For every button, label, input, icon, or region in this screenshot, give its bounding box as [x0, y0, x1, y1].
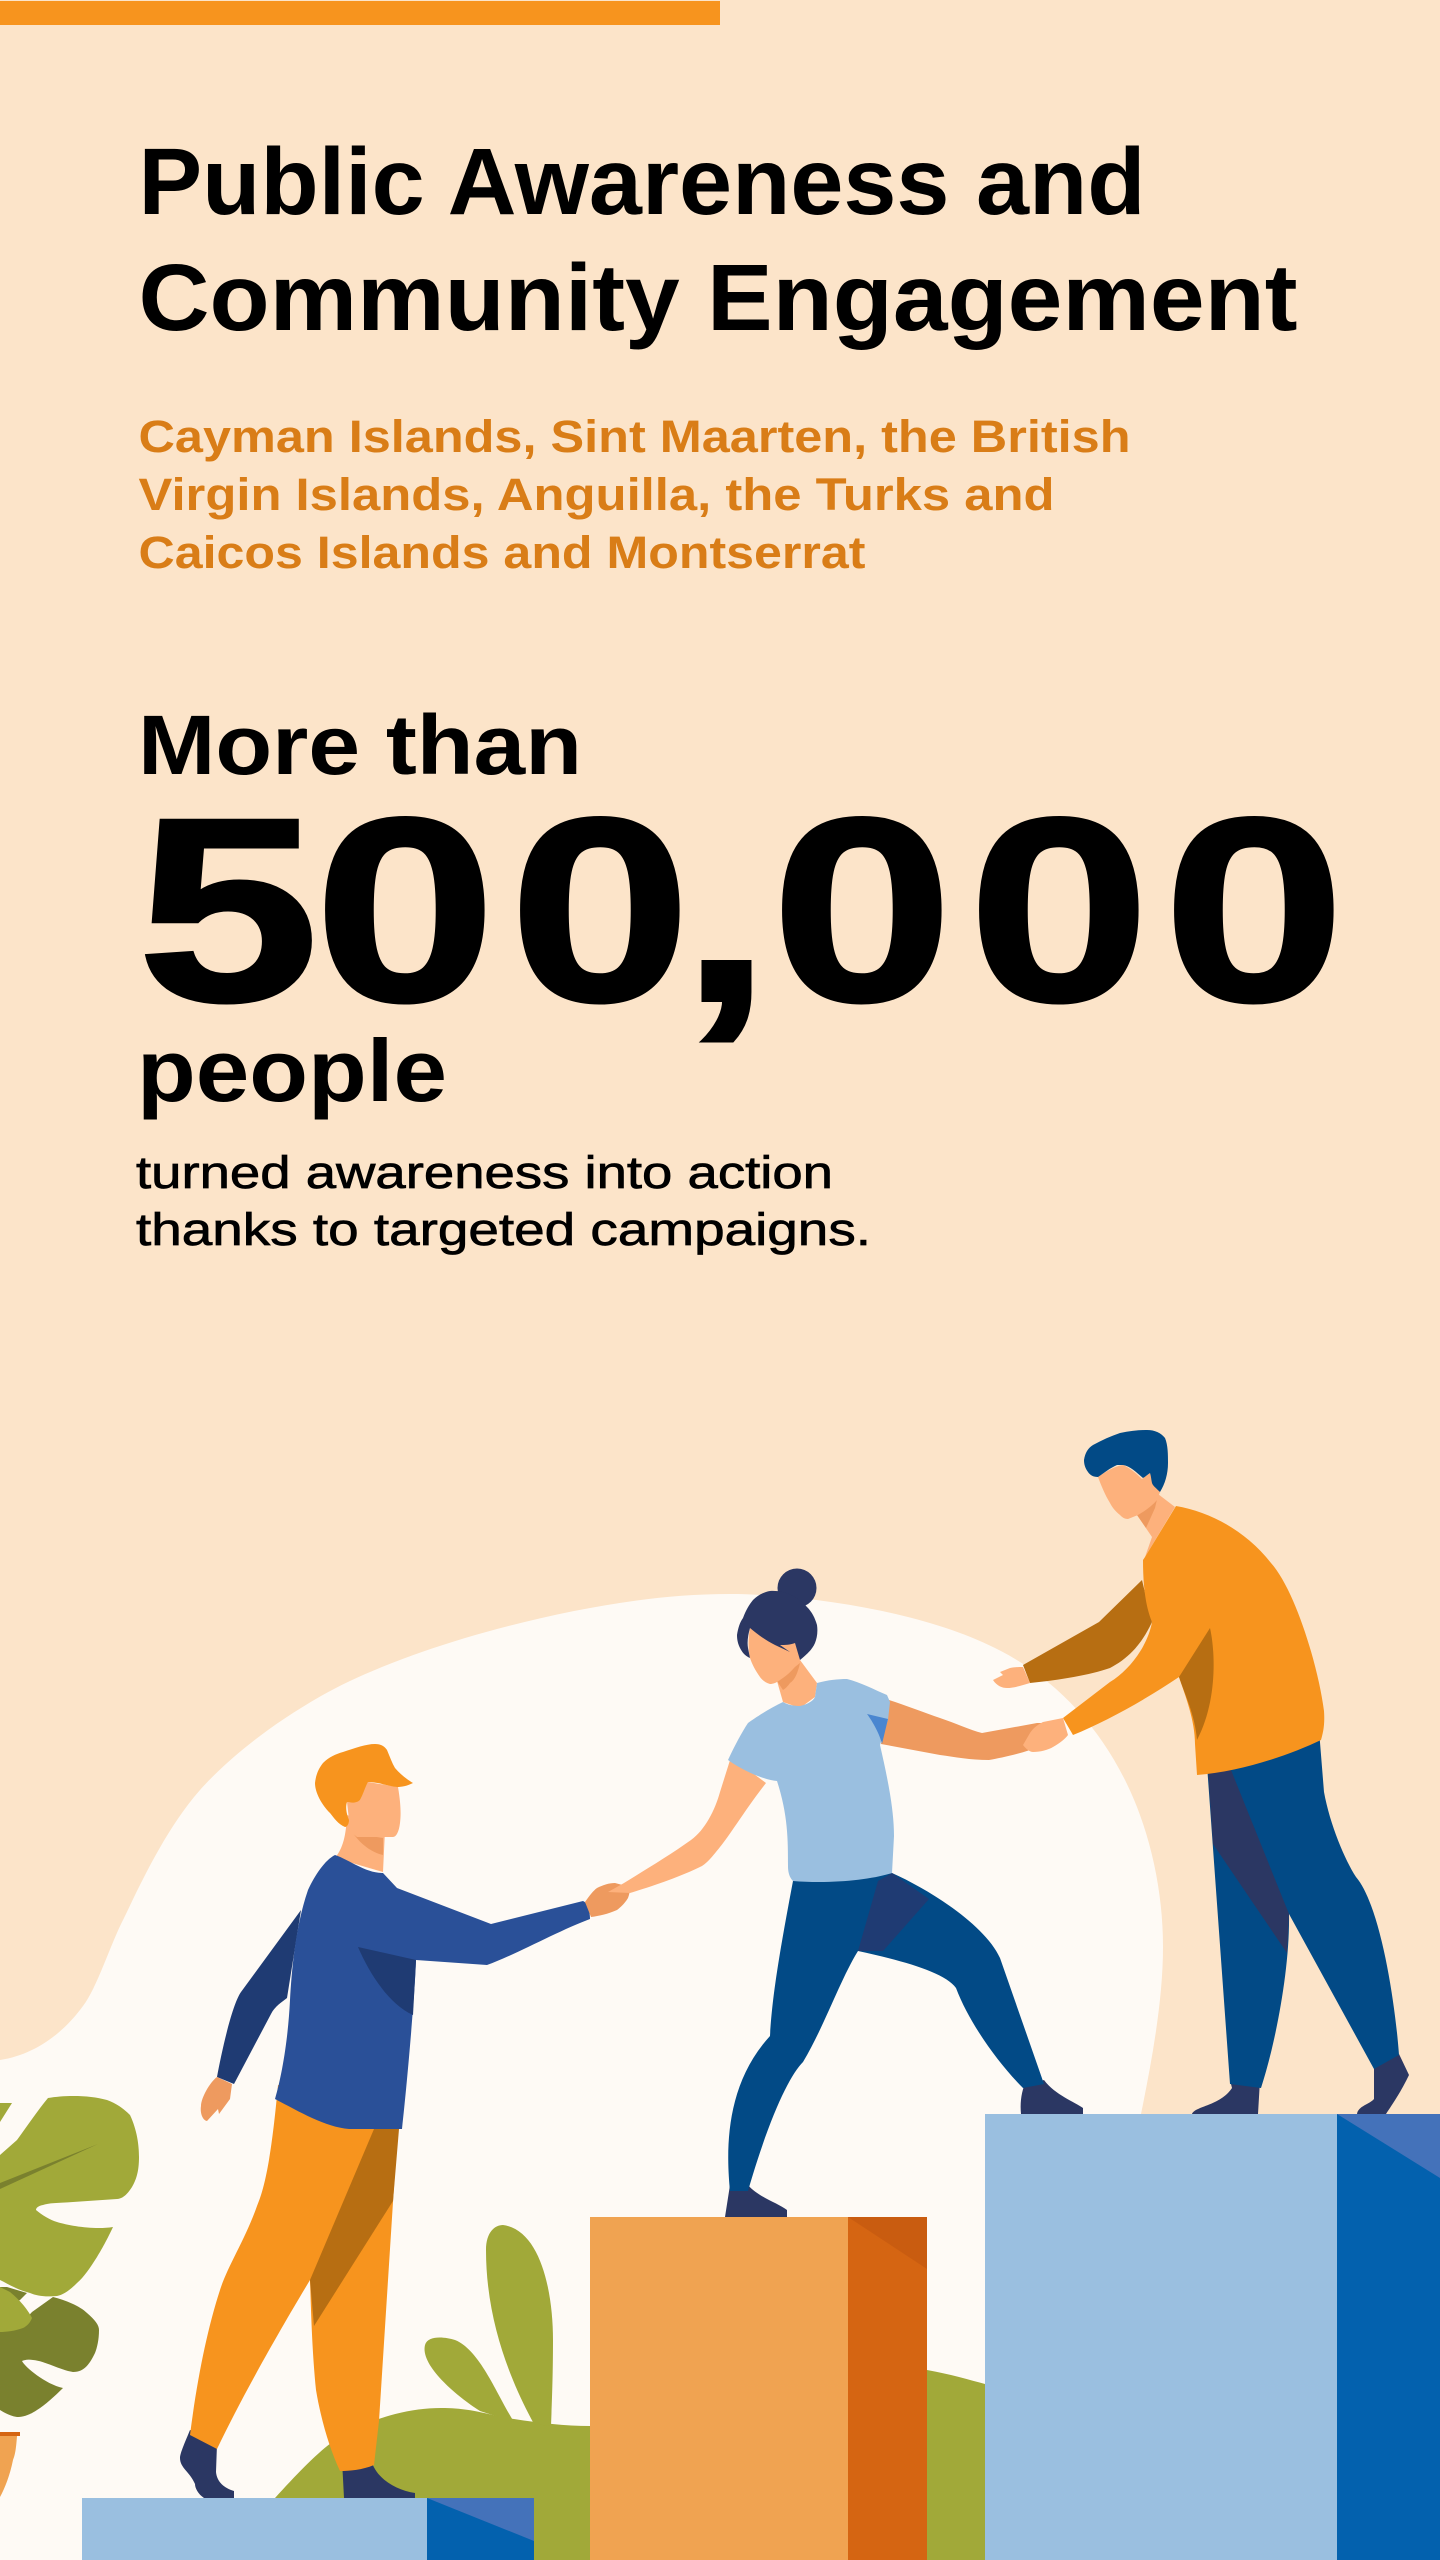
title: Public Awareness and: [138, 129, 1146, 235]
monstera plant: [0, 2096, 139, 2497]
description: [136, 1147, 871, 1255]
white background blob: [0, 1594, 1163, 2560]
subtitle: territories: Virgin Islands, Anguilla, the Turks and: [138, 469, 1054, 520]
description: turned awareness into action: [136, 1147, 833, 1198]
figure: man in orange sweater: [993, 1430, 1409, 2114]
title: Community Engagement: [138, 245, 1298, 351]
description: thanks to targeted campaigns.: [136, 1204, 871, 1255]
stat unit: people: [137, 1021, 447, 1120]
block: left step: [82, 2498, 534, 2560]
subtitle: territories: Caicos Islands and Montserrat: [138, 527, 866, 578]
subtitle: territories: Cayman Islands, Sint Maarten, the British: [138, 411, 1130, 462]
block: right step: [985, 2114, 1440, 2560]
title: [138, 129, 1298, 351]
illustration: [0, 1430, 1440, 2560]
figure: woman in light blue top: [608, 1568, 1083, 2217]
top accent bar: [0, 1, 720, 25]
stat lead-in: More than: [138, 698, 582, 792]
subtitle: territories: [138, 411, 1130, 578]
green mound and foliage: [275, 2225, 985, 2560]
figure: man in blue sweater: [180, 1744, 630, 2498]
big number: 500,000: [137, 764, 1345, 1056]
block: middle step: [590, 2217, 927, 2560]
